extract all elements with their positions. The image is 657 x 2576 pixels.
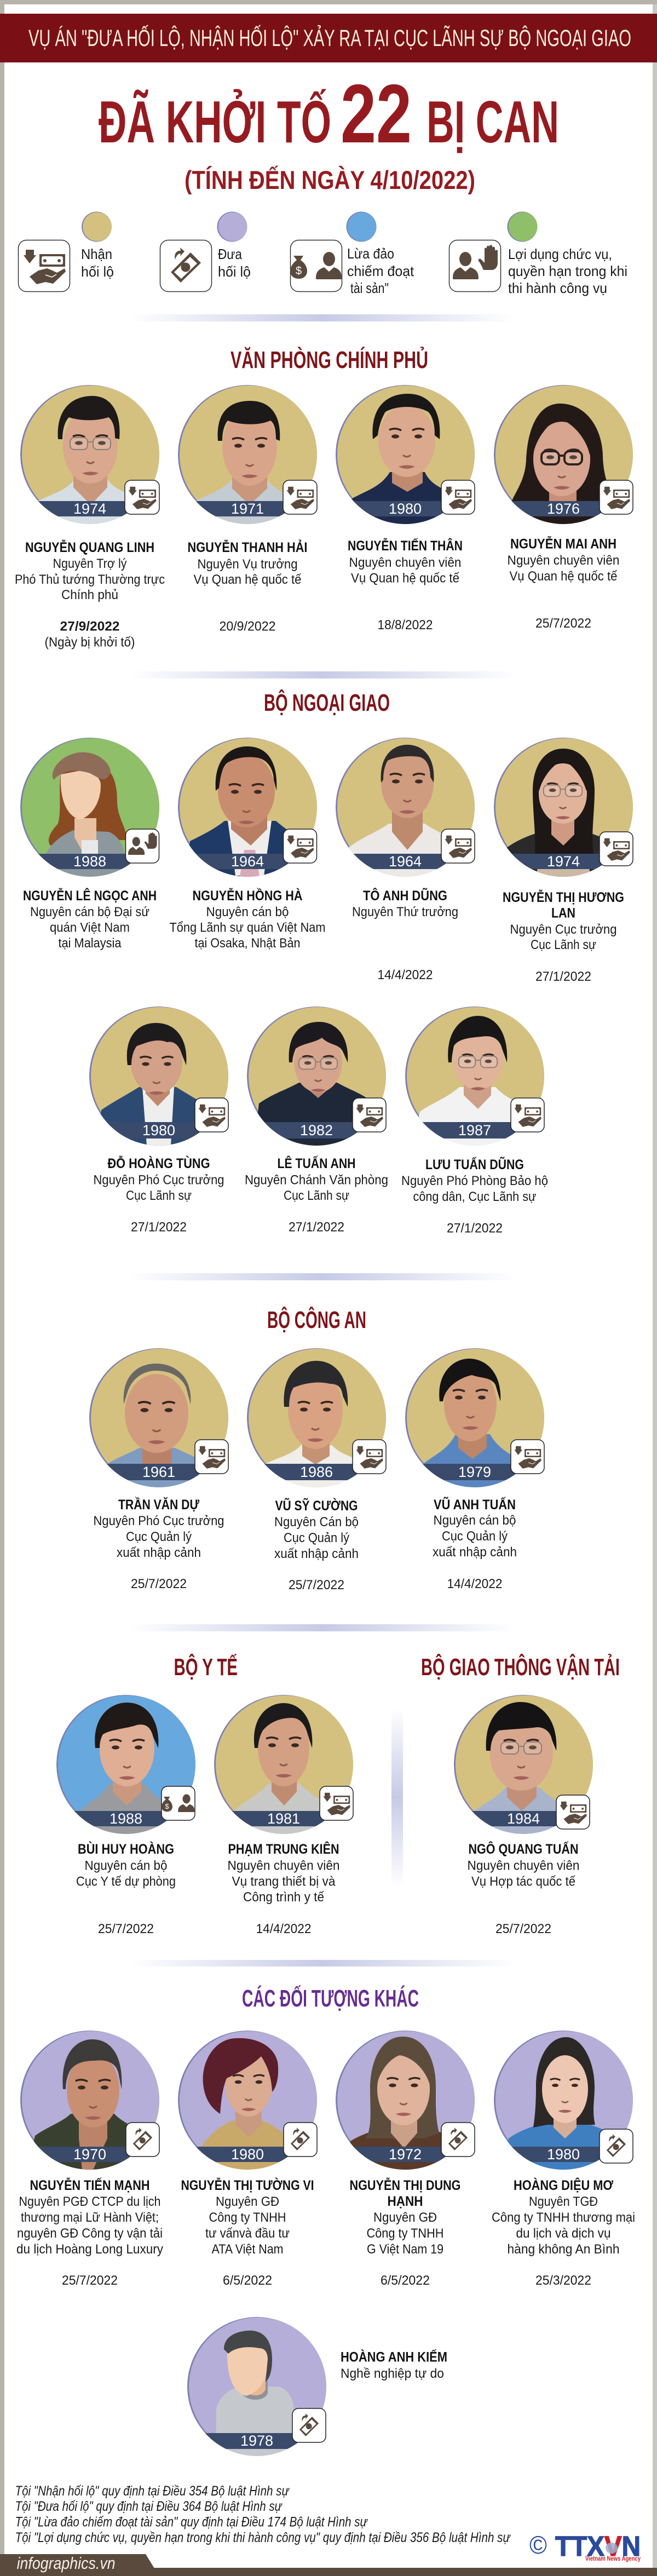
portrait	[492, 738, 635, 878]
badge: receiving bribes	[195, 1440, 228, 1474]
legend item: abuse of power: thi hành công vụ	[508, 280, 607, 296]
name and role: Nguyên Chánh Văn phòng	[245, 1173, 388, 1187]
year: 1961	[142, 1464, 175, 1480]
name and role: Nguyên chuyên viên	[468, 1859, 579, 1873]
name and role: VŨ ANH TUẤN	[434, 1496, 516, 1513]
prosecution date	[45, 619, 135, 649]
name and role: xuất nhập cảnh	[433, 1545, 517, 1560]
portrait	[492, 2031, 635, 2171]
name and role: Công ty TNHH	[209, 2210, 286, 2225]
main title: BỊ CAN	[427, 89, 559, 156]
main title: 22	[341, 67, 412, 160]
portrait	[334, 2031, 476, 2171]
legend item: receiving bribes	[19, 211, 114, 291]
name and role	[76, 1841, 176, 1889]
badge: giving bribes	[284, 2123, 317, 2157]
name and role: Vụ Quan hệ quốc tế	[351, 571, 460, 586]
name and role	[181, 2177, 314, 2257]
name and role: công dân, Cục Lãnh sự	[413, 1189, 537, 1204]
badge: receiving bribes	[353, 1440, 386, 1474]
name and role: nguyên GĐ Công ty vận tải	[17, 2226, 163, 2241]
name and role: PHẠM TRUNG KIÊN	[228, 1841, 339, 1857]
badge: receiving bribes	[600, 480, 633, 514]
portrait	[55, 1695, 197, 1836]
name and role: Công ty TNHH thương mại	[492, 2210, 635, 2225]
year: 1976	[547, 501, 580, 517]
legend item: abuse of power	[449, 211, 627, 296]
name and role: Vụ trang thiết bị và	[232, 1875, 336, 1889]
name and role: ĐỖ HOÀNG TÙNG	[107, 1155, 210, 1171]
year: 1974	[547, 853, 580, 870]
name and role: Nguyên chuyên viên	[507, 553, 620, 568]
person: Tô Anh Dũng	[334, 738, 476, 982]
name and role: BÙI HUY HOÀNG	[78, 1841, 174, 1857]
portrait: anonymous avatar	[186, 2317, 328, 2456]
prosecution date: 27/9/2022	[60, 619, 119, 634]
prosecution date: 25/7/2022	[131, 1577, 187, 1591]
name and role: HẠNH	[388, 2194, 423, 2209]
name and role: Tổng Lãnh sự quán Việt Nam	[170, 920, 325, 935]
name and role: Nguyên chuyên viên	[349, 555, 461, 570]
name and role	[433, 1496, 517, 1560]
badge: receiving bribes	[511, 1098, 544, 1132]
name and role	[348, 537, 463, 586]
name and role: Nguyên Trợ lý	[53, 556, 127, 571]
prosecution date: 27/1/2022	[535, 969, 591, 984]
name and role: NGUYỄN MAI ANH	[510, 536, 616, 552]
portrait	[404, 1348, 546, 1489]
person: Bùi Huy Hoàng	[55, 1695, 197, 1936]
name and role: NGUYỄN TIẾN MẠNH	[30, 2177, 150, 2193]
year: 1980	[231, 2146, 264, 2163]
year: 1974	[73, 501, 106, 517]
name and role: Cục Quản lý	[442, 1529, 508, 1544]
name and role: tại Osaka, Nhật Bản	[195, 936, 300, 951]
year: 1980	[389, 501, 422, 517]
legend item: fraud: chiếm đoạt	[347, 263, 414, 279]
year: 1984	[507, 1810, 540, 1827]
name and role: hàng không An Bình	[507, 2242, 620, 2257]
legend item: giving bribes: hối lộ	[218, 263, 251, 280]
name and role	[228, 1841, 339, 1905]
name and role: xuất nhập cảnh	[117, 1545, 201, 1560]
name and role: Nguyên Thứ trưởng	[352, 905, 458, 919]
name and role	[15, 539, 165, 602]
name and role: tại Malaysia	[58, 936, 122, 951]
name and role: Nguyên cán bộ	[206, 905, 289, 919]
prosecution date: 18/8/2022	[378, 618, 433, 633]
logo: TTXVN: TTXVN	[555, 2531, 641, 2562]
name and role: Nguyên Phó Cục trưởng	[93, 1514, 224, 1528]
portrait	[334, 385, 476, 526]
person: Nguyễn Thị Tường Vi	[176, 2031, 319, 2288]
name and role: NGUYỄN THỊ TƯỜNG VI	[181, 2177, 314, 2193]
name and role	[341, 2349, 447, 2381]
portrait	[245, 1348, 388, 1489]
person: Lê Tuấn Anh	[245, 1007, 388, 1235]
legend item: receiving bribes: Nhận	[81, 246, 112, 262]
name and role: Nguyên cán bộ Đại sứ	[30, 905, 149, 919]
person: Nguyễn Thị Dung Hạnh	[334, 2031, 476, 2288]
legend item: abuse of power: Lợi dụng chức vụ,	[508, 246, 612, 262]
person: Nguyễn Hồng Hà	[170, 738, 325, 951]
year: 1979	[458, 1464, 491, 1480]
badge: giving bribes	[292, 2408, 326, 2442]
footnotes	[15, 2483, 511, 2545]
name and role: Nguyên GĐ	[216, 2194, 279, 2209]
legend item: abuse of power: quyền hạn trong khi	[508, 263, 627, 279]
name and role: NGUYỄN LÊ NGỌC ANH	[23, 887, 157, 904]
name and role: TRẦN VĂN DỰ	[118, 1497, 199, 1513]
name and role	[492, 2177, 635, 2257]
prosecution date: 6/5/2022	[381, 2273, 430, 2288]
name and role: Nghề nghiệp tự do	[341, 2366, 444, 2381]
name and role: NGUYỄN QUANG LINH	[25, 539, 154, 555]
name and role: Cục Lãnh sự	[284, 1188, 349, 1203]
legend item: fraud: tài sản"	[350, 280, 389, 296]
name and role: tư vấnvà đầu tư	[205, 2226, 290, 2241]
name and role	[170, 887, 325, 951]
portrait	[19, 385, 161, 526]
year: 1971	[231, 501, 264, 517]
name and role: Cục Lãnh sự	[126, 1188, 192, 1203]
prosecution date: 14/4/2022	[256, 1922, 311, 1936]
person: Hoàng Diệu Mơ	[492, 2031, 635, 2288]
name and role: LAN	[551, 906, 575, 921]
year: 1970	[73, 2146, 106, 2163]
name and role: Nguyên Phó Phòng Bảo hộ	[401, 1174, 548, 1188]
year: 1982	[300, 1122, 333, 1138]
badge: receiving bribes	[283, 480, 317, 514]
prosecution date: 27/1/2022	[131, 1220, 187, 1235]
prosecution date: 25/3/2022	[535, 2273, 591, 2288]
name and role: Cục Quản lý	[284, 1531, 349, 1545]
name and role: TÔ ANH DŨNG	[363, 887, 447, 904]
name and role: NGUYỄN TIẾN THÂN	[348, 537, 463, 554]
name and role: LÊ TUẤN ANH	[277, 1155, 356, 1171]
year: 1964	[389, 853, 422, 870]
name and role	[187, 539, 308, 587]
person: Hoàng Anh Kiếm	[186, 2317, 447, 2456]
badge: receiving bribes	[353, 1098, 386, 1132]
heading: Các đối tượng khác: CÁC ĐỐI TƯỢNG KHÁC	[242, 1984, 419, 2012]
heading: Bộ Y tế: BỘ Y TẾ	[174, 1653, 238, 1681]
person: Ngô Quang Tuấn	[452, 1695, 595, 1936]
name and role	[503, 889, 624, 952]
name and role: Nguyên cán bộ	[84, 1859, 168, 1873]
person: Nguyễn Mai Anh	[492, 385, 635, 631]
prosecution date: 25/7/2022	[98, 1922, 154, 1936]
badge: receiving bribes	[195, 1098, 228, 1132]
main title: ĐÃ KHỞI TỐ	[99, 89, 331, 156]
name and role	[274, 1497, 359, 1561]
name and role	[349, 2177, 461, 2257]
person: Nguyễn Lê Ngọc Anh	[19, 738, 161, 951]
name and role: Cục Lãnh sự	[531, 938, 596, 952]
portrait	[19, 738, 161, 877]
portrait	[334, 738, 476, 878]
portrait	[404, 1007, 546, 1147]
name and role: VŨ SỸ CƯỜNG	[275, 1497, 358, 1514]
footnotes: Tội "Lợi dụng chức vụ, quyền hạn trong khi thi hành công vụ" quy định tại Điều 356 Bộ luật Hình sự	[15, 2530, 511, 2545]
name and role: Vụ Quan hệ quốc tế	[194, 572, 302, 587]
name and role: Nguyên chuyên viên	[228, 1859, 339, 1873]
name and role	[93, 1155, 224, 1203]
person: Phạm Trung Kiên	[212, 1695, 355, 1936]
prosecution date: 14/4/2022	[378, 968, 433, 982]
person: Nguyễn Quang Linh	[15, 385, 165, 649]
name and role: Công ty TNHH	[367, 2226, 443, 2241]
footnotes: Tội "Lừa đảo chiếm đoạt tài sản" quy định tại Điều 174 Bộ luật Hình sự	[15, 2515, 368, 2530]
badge: receiving bribes	[556, 1795, 590, 1829]
badge: receiving bribes	[600, 832, 633, 866]
person: Lưu Tuấn Dũng	[401, 1007, 548, 1236]
name and role: quán Việt Nam	[50, 920, 130, 935]
name and role	[468, 1841, 579, 1889]
name and role: xuất nhập cảnh	[274, 1546, 359, 1561]
name and role: Nguyên TGĐ	[529, 2194, 598, 2209]
person: Trần Văn Dự	[88, 1348, 230, 1591]
prosecution date: 27/1/2022	[289, 1220, 344, 1235]
name and role	[352, 887, 458, 919]
prosecution date: 25/7/2022	[62, 2273, 118, 2288]
prosecution date: 25/7/2022	[289, 1578, 344, 1592]
name and role	[245, 1155, 388, 1203]
name and role: NGUYỄN HỒNG HÀ	[193, 887, 302, 904]
logo: TTXVN: ©	[529, 2531, 547, 2559]
badge: receiving bribes	[441, 829, 475, 863]
logo: TTXVN: Vietnam News Agency	[585, 2555, 641, 2562]
person: Vũ Anh Tuấn	[404, 1348, 546, 1591]
name and role: Cục Y tế dự phòng	[76, 1875, 176, 1889]
badge: receiving bribes	[441, 480, 475, 514]
legend item: giving bribes: Đưa	[218, 246, 242, 262]
portrait	[176, 385, 319, 526]
name and role: NGÔ QUANG TUẤN	[469, 1841, 578, 1857]
name and role: Nguyên Phó Cục trưởng	[93, 1173, 224, 1187]
badge: receiving bribes	[320, 1786, 353, 1820]
name and role	[507, 536, 620, 584]
person: Đỗ Hoàng Tùng	[88, 1007, 230, 1235]
badge: giving bribes	[600, 2129, 633, 2163]
name and role: thương mại Lữ Hành Việt;	[21, 2210, 159, 2225]
year: 1988	[73, 853, 106, 870]
name and role	[23, 887, 157, 951]
name and role: Vụ Hợp tác quốc tế	[471, 1875, 576, 1889]
subtitle: date: (TÍNH ĐẾN NGÀY 4/10/2022)	[185, 165, 475, 194]
badge: receiving bribes	[511, 1440, 544, 1474]
person: Nguyễn Thị Hương Lan	[492, 738, 635, 984]
year: 1988	[110, 1810, 142, 1827]
badge: receiving bribes	[284, 829, 316, 863]
portrait	[212, 1695, 355, 1836]
name and role: LƯU TUẤN DŨNG	[425, 1156, 524, 1172]
badge: giving bribes	[126, 2123, 159, 2157]
portrait	[176, 2031, 319, 2171]
prosecution date: 27/1/2022	[447, 1221, 503, 1236]
legend item: receiving bribes: hối lộ	[81, 263, 114, 280]
footnotes: Tội "Đưa hối lộ" quy định tại Điều 364 Bộ luật Hình sự	[15, 2499, 283, 2514]
prosecution date: 25/7/2022	[535, 616, 591, 631]
badge: abuse of power	[126, 829, 159, 863]
footer band with site name	[0, 2554, 657, 2576]
name and role	[401, 1156, 548, 1204]
prosecution date: (Ngày bị khởi tố)	[45, 635, 135, 649]
name and role: Cục Quản lý	[126, 1530, 192, 1544]
heading: Văn phòng Chính phủ: VĂN PHÒNG CHÍNH PHỦ	[230, 346, 428, 373]
name and role: NGUYỄN THANH HẢI	[187, 539, 308, 555]
name and role: Nguyên GĐ	[373, 2210, 437, 2225]
portrait	[452, 1695, 595, 1836]
legend item: giving bribes	[160, 211, 251, 291]
year: 1981	[267, 1810, 300, 1827]
name and role: Phó Thủ tướng Thường trực	[15, 572, 165, 587]
person: Vũ Sỹ Cường	[245, 1348, 388, 1592]
person: Nguyễn Tiến Thân	[334, 385, 476, 633]
main title	[99, 67, 559, 160]
badge: giving bribes	[441, 2123, 475, 2157]
name and role: du lịch và dịch vụ	[516, 2226, 611, 2241]
badge: fraud	[162, 1786, 195, 1820]
name and role: NGUYỄN THỊ HƯƠNG	[503, 889, 624, 905]
name and role: HOÀNG ANH KIẾM	[341, 2349, 447, 2365]
badge: receiving bribes	[125, 480, 159, 514]
name and role: Nguyên cán bộ	[434, 1513, 516, 1528]
name and role: Nguyên Vụ trưởng	[197, 557, 298, 572]
portrait	[88, 1348, 230, 1489]
name and role	[16, 2177, 163, 2257]
name and role: NGUYỄN THỊ DUNG	[349, 2177, 461, 2193]
portrait	[19, 2031, 161, 2171]
name and role: Chính phủ	[61, 588, 118, 602]
top banner	[0, 14, 657, 62]
year: 1987	[458, 1122, 491, 1138]
legend item: fraud: Lừa đảo	[347, 245, 394, 262]
person: Nguyễn Tiến Mạnh	[16, 2031, 163, 2288]
legend	[19, 211, 627, 296]
year: 1964	[231, 853, 264, 870]
portrait	[492, 385, 635, 526]
portrait	[88, 1007, 230, 1147]
name and role: Vụ Quan hệ quốc tế	[509, 569, 618, 584]
name and role: Nguyên Cán bộ	[274, 1515, 359, 1530]
name and role: G Việt Nam 19	[367, 2242, 443, 2257]
year: 1980	[142, 1122, 175, 1138]
footnotes: Tội "Nhận hối lộ" quy định tại Điều 354 Bộ luật Hình sự	[15, 2483, 290, 2499]
footer band with site name: infographics.vn	[17, 2554, 116, 2573]
name and role: ATA Việt Nam	[211, 2242, 284, 2257]
name and role: Công trình y tế	[243, 1890, 325, 1905]
name and role: HOÀNG DIỆU MƠ	[514, 2177, 614, 2193]
prosecution date: 25/7/2022	[495, 1922, 551, 1936]
name and role	[93, 1497, 224, 1560]
portrait	[245, 1007, 388, 1147]
name and role: du lịch Hoàng Long Luxury	[16, 2242, 163, 2257]
heading: Bộ Ngoại giao: BỘ NGOẠI GIAO	[264, 688, 390, 716]
prosecution date: 20/9/2022	[219, 619, 276, 634]
year: 1978	[240, 2433, 273, 2449]
person: Nguyễn Thanh Hải	[176, 385, 319, 634]
portrait	[176, 738, 319, 878]
name and role: Nguyên PGĐ CTCP du lịch	[19, 2194, 161, 2209]
year: 1980	[547, 2146, 580, 2163]
year: 1986	[300, 1464, 333, 1480]
legend item: fraud	[290, 211, 414, 296]
prosecution date: 6/5/2022	[223, 2273, 272, 2288]
heading: Bộ Công an: BỘ CÔNG AN	[267, 1306, 366, 1333]
name and role: Nguyên Cục trưởng	[510, 922, 616, 937]
year: 1972	[389, 2146, 422, 2163]
prosecution date: 14/4/2022	[447, 1577, 503, 1591]
